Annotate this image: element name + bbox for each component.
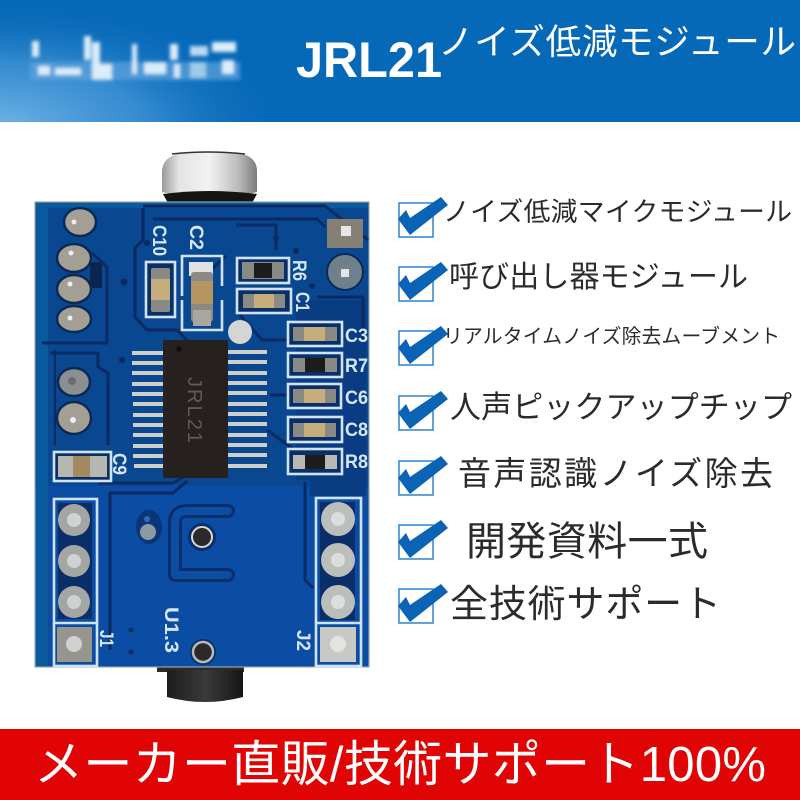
silkscreen labels: C10 — [148, 225, 169, 256]
silkscreen labels: C1 — [291, 292, 312, 312]
header title: ノイズ低減モジュール — [438, 22, 796, 62]
item: development materials: 開発資料一式 — [466, 520, 708, 564]
silkscreen labels: R6 — [288, 260, 309, 281]
blurred logo — [30, 36, 240, 80]
mounting holes — [190, 527, 216, 665]
item: noise reduction mic module: ノイズ低減マイクモジュール — [443, 197, 792, 227]
mounting pad — [228, 320, 252, 344]
resistor R8 — [288, 449, 342, 474]
item: noise reduction mic module — [398, 197, 792, 237]
silkscreen labels: C8 — [345, 420, 368, 441]
through-hole pads: left — [57, 208, 96, 434]
silkscreen labels: J1 — [95, 630, 116, 647]
header banner — [0, 0, 800, 122]
circuit board — [35, 202, 369, 667]
capacitor C1 — [237, 289, 291, 313]
silkscreen labels — [95, 225, 368, 653]
item: real-time noise removal: リアルタイムノイズ除去ムーブメント — [443, 325, 780, 348]
capacitor C8 — [288, 417, 342, 442]
silkscreen capacitor C2 — [182, 256, 222, 330]
product photo: PCB module — [35, 152, 369, 702]
silkscreen labels: J2 — [292, 630, 313, 651]
silkscreen labels: C6 — [345, 388, 368, 409]
footer text: メーカー直販/技術サポート100% — [34, 738, 766, 792]
capacitor C9 — [54, 452, 111, 481]
silkscreen labels: C2 — [185, 225, 206, 250]
resistor R6 — [237, 258, 289, 283]
silkscreen labels: C9 — [108, 453, 129, 475]
capacitor C6 — [288, 384, 341, 408]
resistor R7 — [288, 353, 342, 377]
item: real-time noise removal — [398, 325, 780, 365]
chip marking: JRL21 — [183, 377, 205, 443]
silkscreen labels: R7 — [345, 356, 368, 377]
feature checklist — [398, 197, 792, 626]
small via dots — [119, 235, 315, 654]
header J1 — [54, 499, 97, 666]
silkscreen labels: U1.3 — [160, 607, 181, 653]
through-hole pads: top right — [327, 219, 363, 290]
small test pad — [136, 510, 162, 544]
C-shaped ground trace — [175, 511, 228, 575]
silkscreen capacitor C10 — [146, 262, 175, 317]
item: voice pickup chip: 人声ピックアップチップ — [450, 390, 792, 425]
item: full technical support: 全技術サポート — [450, 584, 721, 626]
traces — [42, 206, 368, 650]
capacitor C3 — [288, 322, 342, 346]
product name: JRL21 — [296, 32, 442, 88]
microphone capsule — [162, 152, 257, 203]
header J2 — [316, 498, 361, 666]
silkscreen labels: R8 — [345, 452, 368, 473]
footer banner — [0, 729, 800, 800]
silkscreen labels: C3 — [345, 326, 368, 347]
dark copper areas — [90, 262, 366, 496]
audio jack — [157, 667, 244, 702]
item: speech recognition denoise: 音声認識ノイズ除去 — [458, 455, 773, 492]
IC chip — [132, 340, 267, 478]
item: caller module: 呼び出し器モジュール — [449, 261, 748, 294]
